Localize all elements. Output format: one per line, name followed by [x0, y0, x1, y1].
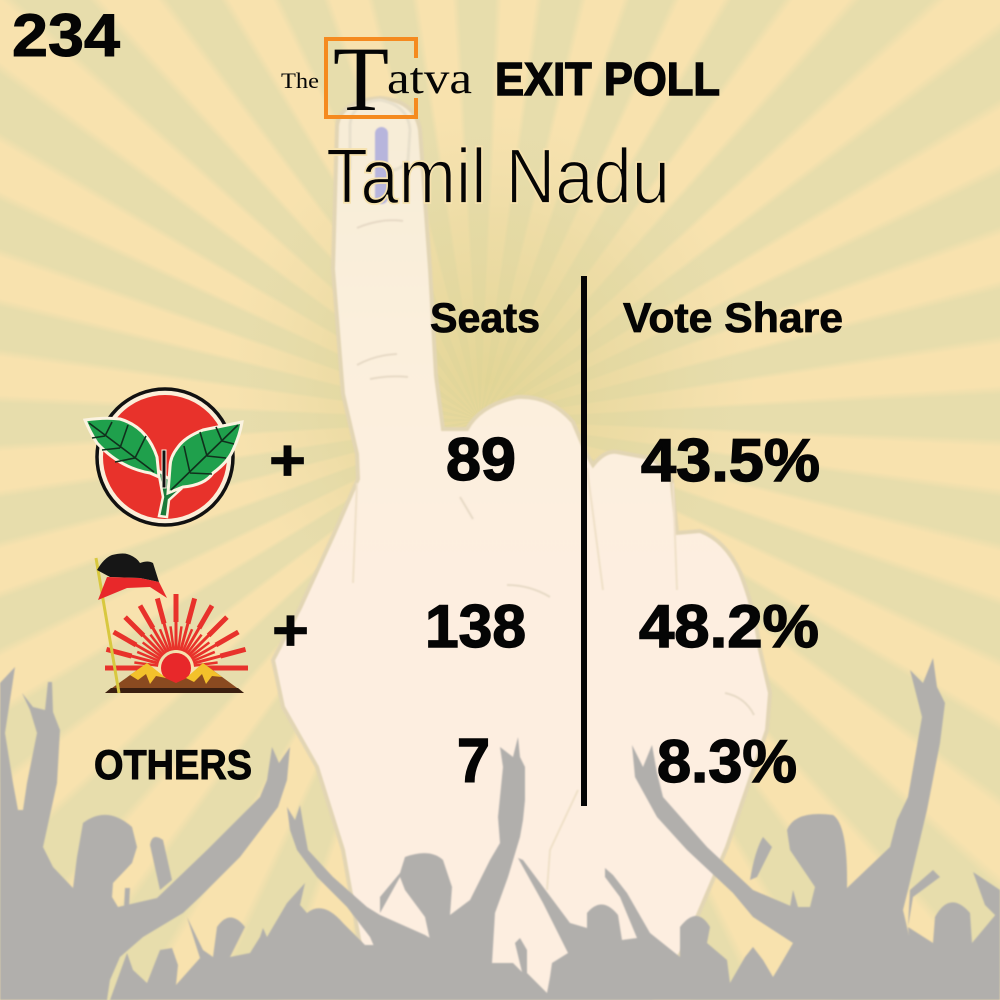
flag	[97, 554, 159, 582]
logo: The Tatva: atva	[387, 54, 472, 103]
plus sign: DMK alliance: +	[272, 598, 309, 663]
total seats number: 234	[12, 2, 121, 69]
sun rays	[105, 594, 248, 668]
logo: The Tatva	[281, 28, 472, 130]
value: AIADMK vote share: 43.5%	[641, 427, 820, 494]
column heading: vote share: Vote Share	[623, 294, 843, 341]
mountains	[105, 663, 244, 693]
logo orange frame	[326, 39, 416, 117]
right leaf	[168, 422, 242, 493]
stem	[158, 470, 181, 517]
heading: exit poll: EXIT POLL	[495, 53, 720, 105]
icon: DMK rising sun symbol	[96, 554, 248, 693]
value: DMK vote share: 48.2%	[639, 593, 819, 660]
icon: AIADMK two leaves symbol	[85, 389, 242, 525]
value: others seats: 7	[457, 727, 490, 796]
value: others vote share: 8.3%	[657, 728, 797, 795]
finger ink mark	[375, 127, 388, 204]
value: DMK seats: 138	[425, 593, 526, 660]
sun disc	[161, 653, 191, 683]
finger creases	[357, 220, 754, 715]
plus sign: AIADMK alliance: +	[269, 428, 306, 493]
flag pole	[96, 558, 119, 693]
logo wordmark: The	[281, 68, 319, 93]
logo: The Tatva: T	[333, 28, 389, 130]
fingernail outline	[350, 100, 410, 170]
column divider	[581, 276, 587, 806]
illustration: cheering crowd silhouette	[0, 658, 1000, 1000]
heading: state name: Tamil Nadu	[326, 132, 670, 220]
hand finger separations	[353, 468, 677, 890]
label: others: OTHERS	[94, 741, 252, 788]
value: AIADMK seats: 89	[446, 426, 516, 493]
illustration: hand with raised inked finger	[273, 98, 770, 1000]
left leaf	[85, 418, 159, 477]
column heading: seats: Seats	[430, 294, 540, 341]
background glow behind the hand	[200, 100, 800, 680]
